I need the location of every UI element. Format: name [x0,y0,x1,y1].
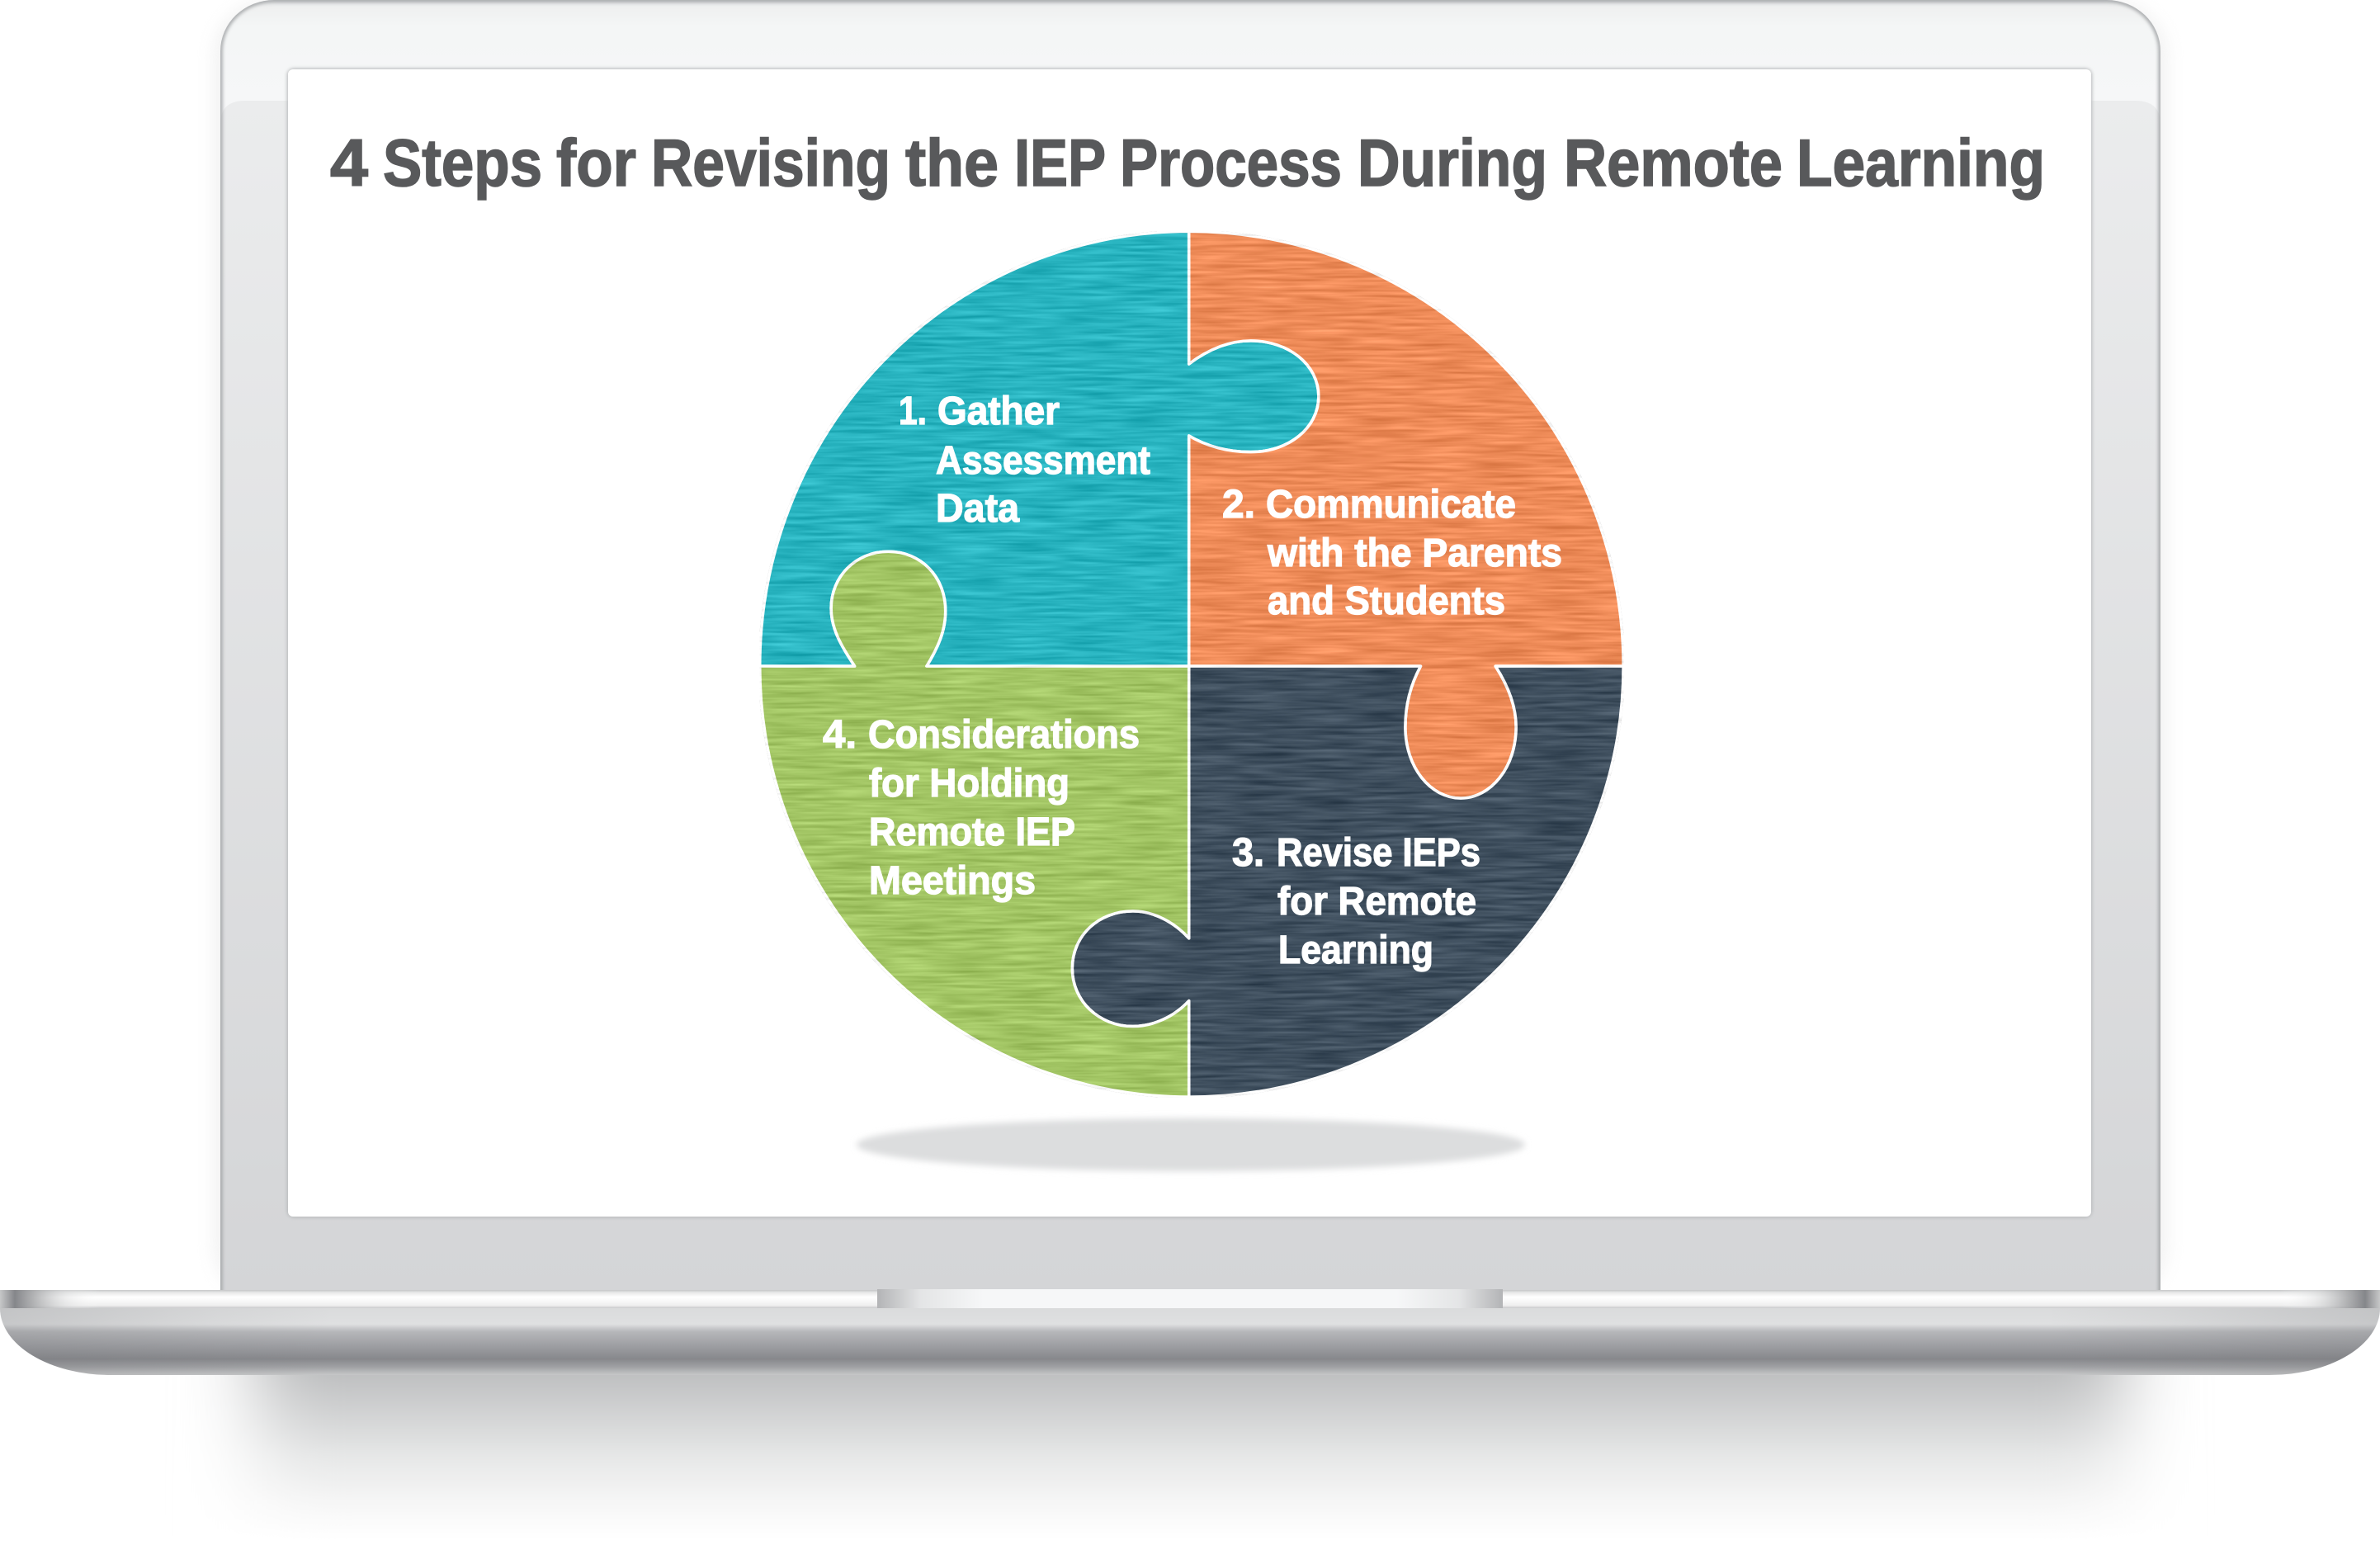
step 1 label: Assessment [936,439,1150,483]
step 2 label: and Students [1268,579,1505,623]
step 4 label: 4. [823,713,857,757]
puzzle piece 3: navy [1072,666,1623,1097]
base trackpad notch [877,1289,1503,1308]
title: the [905,126,999,201]
step 4 label: Considerations [868,713,1140,757]
puzzle ground shadow [857,1118,1525,1171]
puzzle circle [760,231,1623,1097]
title [330,126,2045,201]
puzzle piece 1: teal [760,231,1319,666]
base hinge strip [0,1290,2380,1308]
base lower body [0,1308,2380,1375]
screen [287,69,2092,1217]
puzzle piece 2: orange [1189,231,1623,798]
step 4 label: Meetings [869,859,1036,903]
step 2 label [1222,483,1562,623]
laptop shadow [215,1375,2165,1505]
step 2 label: 2. [1222,483,1255,527]
step 2 label: Communicate [1266,483,1516,527]
title: 4 [330,126,368,201]
title: Remote [1564,126,1783,201]
title: IEP [1014,126,1106,201]
puzzle piece 4: green [760,551,1189,1097]
step 3 label: Learning [1278,929,1433,972]
title: for [556,126,636,201]
title: Learning [1797,126,2045,201]
step 3 label [1232,831,1480,972]
laptop base [0,1289,2380,1375]
title: Revising [651,126,890,201]
step 4 label [823,713,1140,903]
step 1 label [899,390,1150,531]
step 4 label: for Holding [869,762,1070,806]
step 4 label: Remote IEP [869,810,1075,854]
step 1 label: 1. [899,390,927,433]
title: During [1358,126,1547,201]
step 1 label: Data [936,487,1019,531]
title: Process [1120,126,1342,201]
step 3 label: for Remote [1277,880,1476,924]
step 3 label: Revise IEPs [1277,831,1480,875]
laptop lid [216,0,2165,1374]
step 2 label: with the Parents [1267,532,1562,575]
title: Steps [383,126,542,201]
step 3 label: 3. [1232,831,1264,875]
step 1 label: Gather [937,390,1060,433]
